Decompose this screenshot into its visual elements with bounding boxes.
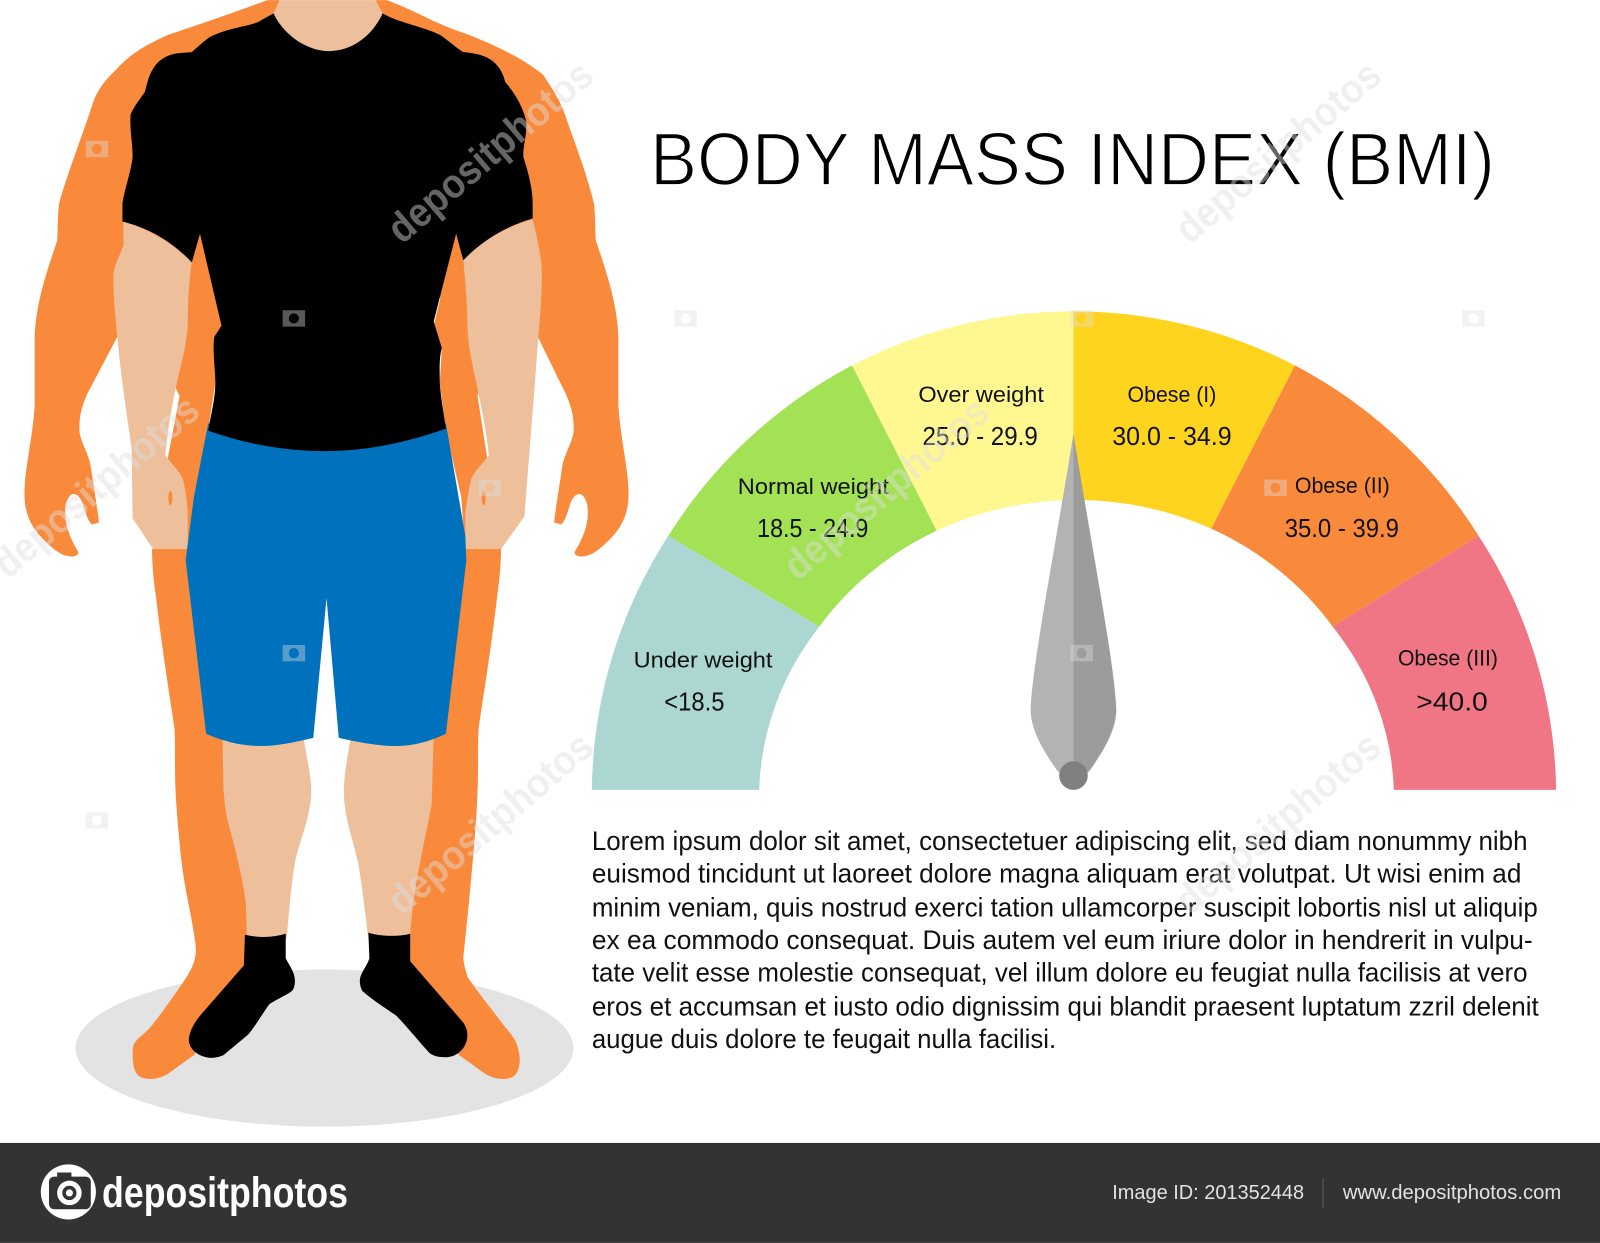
segment: obese I bbox=[1073, 311, 1295, 529]
t-shirt bbox=[122, 13, 533, 451]
segment: obese II: Obese (II) bbox=[1295, 473, 1390, 498]
neck bbox=[273, 0, 383, 51]
stock watermarks: depositphotos bbox=[1166, 51, 1390, 252]
stock watermarks: depositphotos bbox=[774, 388, 998, 589]
title: BODY MASS INDEX (BMI) bbox=[650, 118, 1495, 202]
right sock bbox=[360, 933, 467, 1057]
segment: obese III: Obese (III) bbox=[1398, 645, 1498, 670]
segment: over weight bbox=[852, 311, 1073, 531]
segment: over weight: 25.0 - 29.9 bbox=[922, 423, 1038, 451]
body text: euismod tincidunt ut laoreet dolore magna aliquam erat volutpat. Ut wisi enim ad bbox=[592, 859, 1521, 889]
body text: ex ea commodo consequat. Duis autem vel eum iriure dolor in hendrerit in vulpu- bbox=[592, 925, 1533, 955]
segment: normal weight: Normal weight bbox=[738, 474, 890, 499]
footer bar bbox=[0, 1143, 1600, 1243]
stock watermarks: depositphotos bbox=[1166, 723, 1390, 923]
website: www.depositphotos.com bbox=[1342, 1182, 1561, 1204]
gauge needle bbox=[1031, 434, 1116, 790]
logo wordmark: depositphotos bbox=[102, 1169, 348, 1217]
segment: normal weight bbox=[668, 365, 937, 627]
segment: over weight: Over weight bbox=[918, 382, 1045, 407]
segment: obese II: 35.0 - 39.9 bbox=[1285, 515, 1399, 543]
shorts bbox=[186, 424, 466, 746]
right leg bbox=[344, 735, 434, 939]
body text: augue duis dolore te feugait nulla facilisi. bbox=[592, 1024, 1056, 1054]
body text bbox=[592, 826, 1539, 1054]
body text: tate velit esse molestie consequat, vel illum dolore eu feugiat nulla facilisis at vero bbox=[592, 958, 1528, 988]
body text: Lorem ipsum dolor sit amet, consectetuer adipiscing elit, sed diam nonummy nibh bbox=[592, 826, 1528, 856]
body text: minim veniam, quis nostrud exerci tation ullamcorper suscipit lobortis nisl ut aliquip bbox=[592, 892, 1538, 922]
figure: body comparison bbox=[24, 0, 629, 1127]
segment: obese I: 30.0 - 34.9 bbox=[1112, 423, 1232, 451]
image id: Image ID: 201352448 bbox=[1112, 1182, 1304, 1204]
left sock bbox=[189, 934, 295, 1058]
silhouette: larger body, left side bbox=[24, 0, 286, 1079]
segment: normal weight: 18.5 - 24.9 bbox=[757, 515, 868, 543]
segment: under weight: Under weight bbox=[634, 647, 773, 672]
segment: obese II bbox=[1211, 365, 1479, 627]
segment: obese I: Obese (I) bbox=[1128, 382, 1216, 407]
stock watermarks bbox=[0, 51, 1485, 923]
segment: obese III: >40.0 bbox=[1416, 688, 1488, 716]
stock watermarks: depositphotos bbox=[378, 723, 602, 923]
gauge: BMI categories bbox=[592, 311, 1556, 790]
silhouette: larger body, right side bbox=[369, 0, 629, 1079]
left arm bbox=[113, 222, 192, 549]
floor shadow bbox=[76, 969, 573, 1127]
right arm bbox=[463, 219, 542, 549]
segment: under weight: <18.5 bbox=[664, 688, 724, 716]
body text: eros et accumsan et iusto odio dignissim qui blandit praesent luptatum zzril delenit bbox=[592, 991, 1539, 1021]
left hand mark bbox=[168, 491, 172, 505]
segment: under weight bbox=[592, 536, 819, 790]
segment: obese III bbox=[1333, 536, 1556, 790]
right hand mark bbox=[482, 491, 486, 505]
left leg bbox=[222, 735, 311, 939]
stock watermarks: depositphotos bbox=[378, 51, 602, 252]
icon: camera logo bbox=[41, 1164, 96, 1219]
